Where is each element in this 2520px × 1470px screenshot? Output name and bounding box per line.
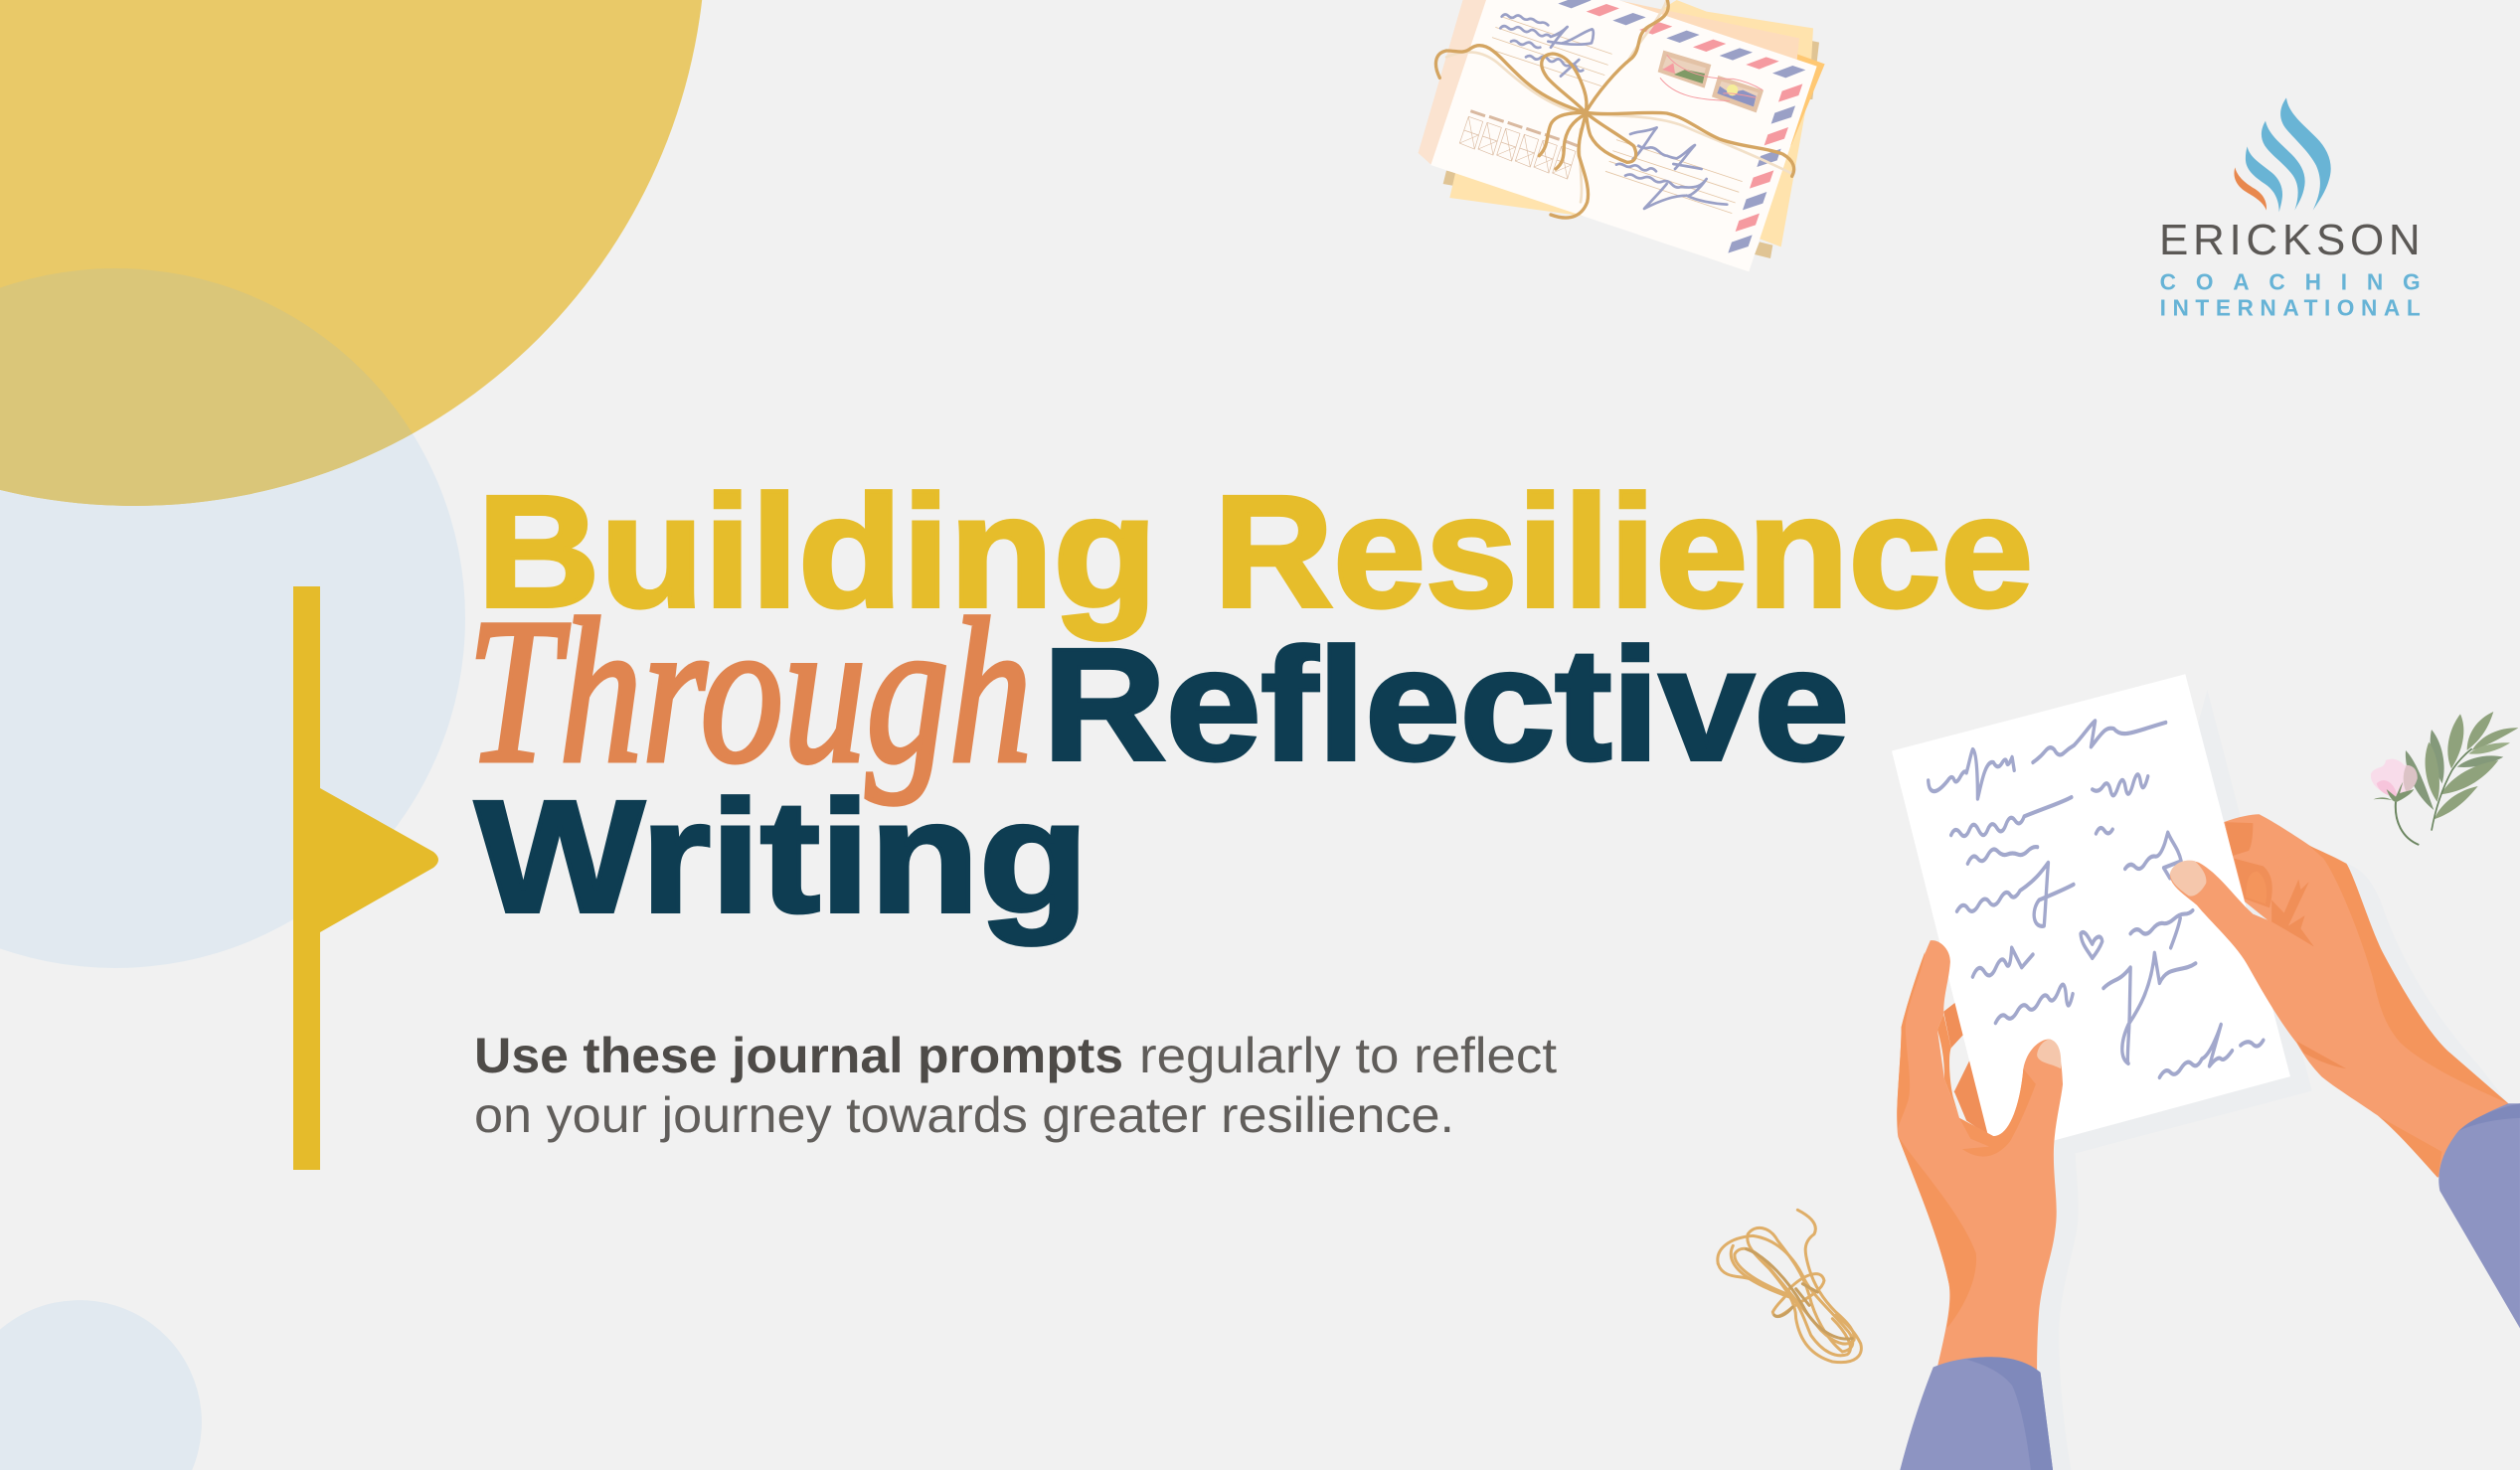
logo wordmark (2159, 216, 2421, 320)
letter paper (1892, 674, 2290, 1157)
title (467, 462, 2033, 945)
string bow (1435, 0, 1794, 218)
illustration: flower and leaf sprig (2371, 712, 2518, 845)
logo wordmark: INTERNATIONAL (2160, 294, 2421, 320)
handwriting (1500, 14, 1727, 209)
icon: flame mark (2234, 97, 2331, 212)
address lines (1489, 17, 1743, 214)
right hand (2170, 846, 2508, 1178)
illustration: airmail envelopes tied with string (1419, 0, 1825, 271)
back fingers of hands (1943, 814, 2325, 1139)
stems (2432, 748, 2472, 831)
logo wordmark: ERICKSON (2159, 216, 2421, 264)
airmail stripes (1558, 0, 1805, 253)
handwriting on letter (1929, 721, 2264, 1077)
icon: yellow flag marker (293, 586, 438, 1170)
subtitle text: Use these journal prompts (474, 1028, 1123, 1083)
logo: Erickson Coaching International (2159, 97, 2421, 320)
title: Building (477, 462, 1157, 640)
string bow shadow (1446, 0, 1792, 202)
title: Resilience (1214, 462, 2033, 640)
title: Reflective (1043, 615, 1849, 793)
stamps (1658, 51, 1764, 112)
left sleeve (1900, 1357, 2053, 1470)
title: Writing (475, 767, 1089, 945)
subtitle text (474, 1028, 1557, 1143)
logo wordmark: COACHING (2160, 269, 2421, 295)
postal code boxes (1459, 116, 1576, 179)
illustration: twine bundle (1718, 1210, 1861, 1363)
shadow behind paper and hands (2035, 690, 2508, 1470)
leaves (2406, 712, 2518, 819)
flower (2371, 759, 2418, 802)
subtitle text: on your journey towards greater resilience. (474, 1087, 1454, 1143)
right sleeve (2438, 1103, 2520, 1328)
decorative circles background (0, 0, 706, 1470)
left hand (1897, 940, 2063, 1373)
title: Through (467, 576, 1032, 805)
illustration: hands holding handwritten letter (1892, 674, 2520, 1470)
subtitle text: regularly to reflect (1139, 1028, 1557, 1083)
